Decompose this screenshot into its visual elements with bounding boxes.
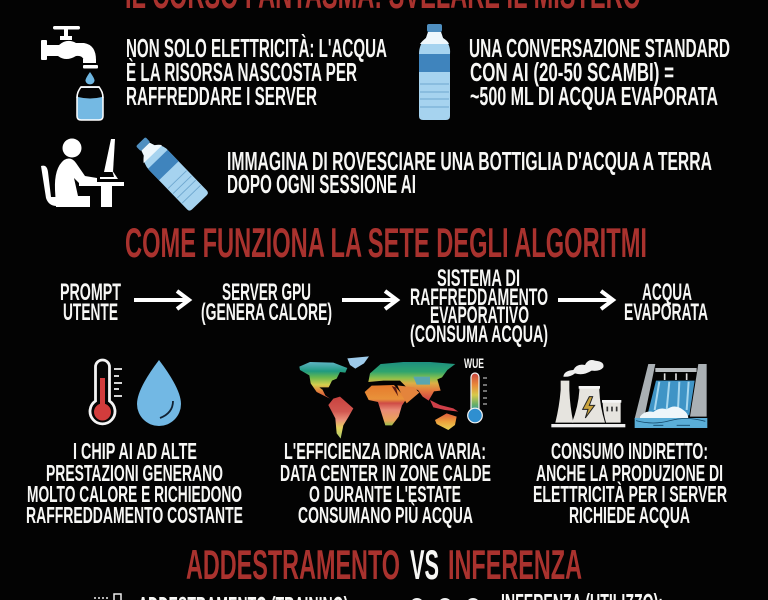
text: pour a bottle on the ground: DOPO OGNI SESSIONE AI bbox=[227, 169, 416, 199]
flow step: evaporative cooling: EVAPORATIVO bbox=[430, 302, 529, 329]
text: water for cooling: È LA RISORSA NASCOSTA PER bbox=[126, 57, 357, 87]
arrow bbox=[558, 291, 613, 309]
flow step: evaporative cooling: (CONSUMA ACQUA) bbox=[410, 321, 548, 348]
text: conversation equals 500 ml bbox=[469, 33, 730, 111]
heading: training vs inference: ADDESTRAMENTO bbox=[186, 541, 400, 588]
label: WUE: WUE bbox=[464, 355, 484, 371]
flow step: user prompt: PROMPT bbox=[60, 279, 121, 306]
flow step: GPU server: (GENERA CALORE) bbox=[201, 299, 332, 326]
text: AI chips heat: I CHIP AI AD ALTE bbox=[73, 438, 197, 464]
text: water efficiency varies bbox=[280, 438, 491, 528]
text: water for cooling: RAFFREDDARE I SERVER bbox=[126, 81, 317, 111]
chart: world heat map bbox=[299, 356, 458, 439]
text: water for cooling: NON SOLO ELETTRICITÀ: L'ACQUA bbox=[126, 33, 387, 63]
text: water for cooling bbox=[126, 33, 387, 111]
text: water efficiency varies: DATA CENTER IN ZONE CALDE bbox=[280, 460, 491, 486]
icon: training server bbox=[94, 594, 121, 600]
icon: WUE thermometer bbox=[468, 373, 487, 423]
flow step: evaporated water: ACQUA bbox=[642, 279, 692, 306]
text: AI chips heat: MOLTO CALORE E RICHIEDONO bbox=[27, 481, 242, 507]
heading: training vs inference: VS bbox=[410, 541, 439, 588]
text: water efficiency varies: CONSUMANO PIÙ ACQUA bbox=[298, 501, 473, 528]
text: indirect consumption bbox=[533, 438, 727, 528]
icon: tipped water bottle bbox=[131, 132, 209, 212]
icon: water bottle bbox=[419, 24, 450, 120]
icon: water drop bbox=[137, 360, 181, 426]
arrow bbox=[134, 291, 189, 309]
text: AI chips heat: RAFFREDDAMENTO COSTANTE bbox=[26, 502, 243, 528]
icon: power plant bbox=[551, 360, 625, 427]
text: water efficiency varies: O DURANTE L'ESTATE bbox=[309, 481, 461, 507]
flow step: user prompt: UTENTE bbox=[63, 299, 118, 326]
flow step: evaporative cooling: SISTEMA DI bbox=[437, 265, 520, 292]
flow step: user prompt bbox=[60, 279, 121, 326]
flow step: evaporative cooling: RAFFREDDAMENTO bbox=[410, 284, 548, 311]
heading: training vs inference: INFERENZA bbox=[448, 541, 582, 588]
icon: hydroelectric dam bbox=[635, 364, 707, 428]
text: AI chips heat: PRESTAZIONI GENERANO bbox=[46, 460, 223, 486]
text: AI chips heat bbox=[26, 438, 243, 528]
text: indirect consumption: RICHIEDE ACQUA bbox=[569, 502, 690, 528]
flow step: GPU server bbox=[201, 279, 332, 326]
arrow bbox=[342, 291, 397, 309]
icon: thermometer bbox=[90, 360, 122, 424]
flow step: evaporated water: EVAPORATA bbox=[624, 299, 708, 326]
flow step: evaporated water bbox=[624, 279, 708, 326]
text: water efficiency varies: L'EFFICIENZA IDRICA VARIA: bbox=[284, 438, 486, 464]
flow step: evaporative cooling bbox=[410, 265, 548, 348]
icon: faucet filling a bottle bbox=[41, 26, 103, 120]
text: pour a bottle on the ground bbox=[227, 146, 712, 199]
flow step: GPU server: SERVER GPU bbox=[222, 279, 311, 306]
icon: inference users bbox=[410, 598, 480, 600]
icon: person at a desk bbox=[41, 138, 124, 207]
